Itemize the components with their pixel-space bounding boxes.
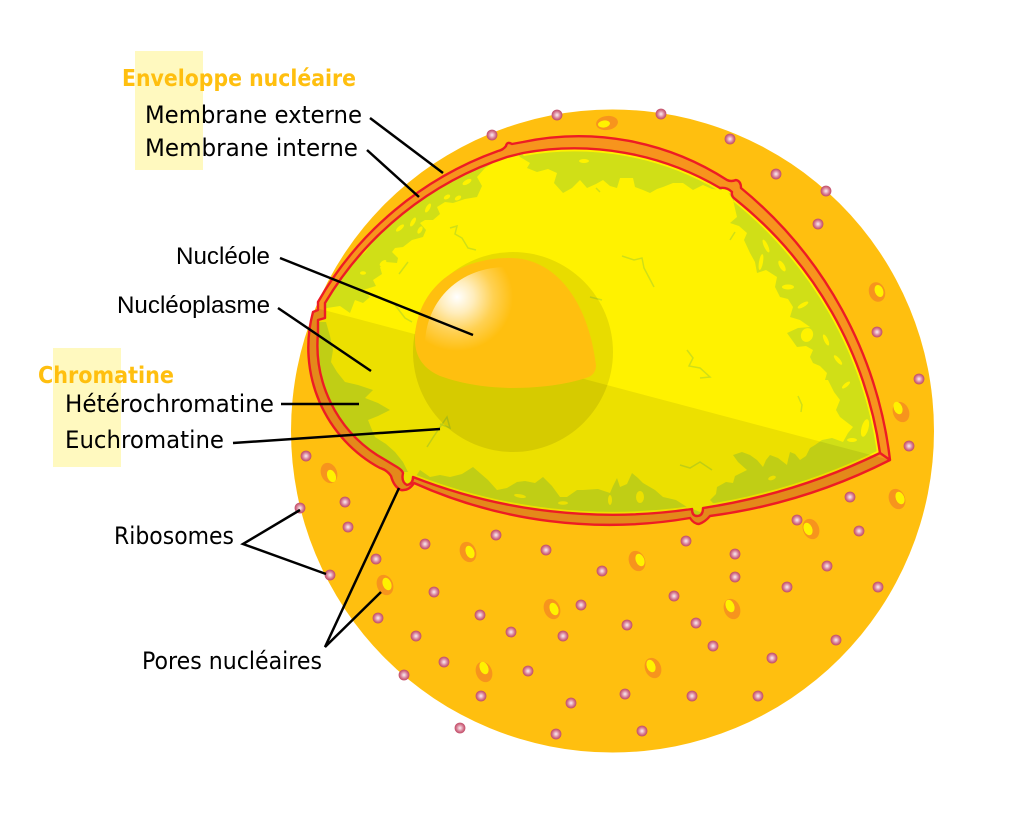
outer and inner membrane lines [308, 136, 890, 525]
arrow: membrane interne [367, 150, 419, 197]
label: ribosomes: Ribosomes [114, 522, 234, 550]
membrane band [308, 136, 890, 525]
heterochromatin [318, 151, 877, 515]
arrow: euchromatine [233, 429, 440, 443]
heading: enveloppe nucléaire: Enveloppe nucléaire [122, 66, 356, 92]
label: hétérochromatine: Hétérochromatine [65, 390, 274, 418]
chromatin holes [360, 159, 871, 505]
heading: chromatine: Chromatine [38, 363, 174, 389]
label: nucléole: Nucléole [176, 243, 270, 270]
ribosomes [295, 109, 924, 739]
arrow: pores nucléaires [325, 488, 399, 647]
highlight: enveloppe labels [135, 51, 203, 170]
nuclear pores on cytoplasm [318, 115, 912, 685]
highlight: chromatine labels [53, 348, 121, 467]
label: membrane interne: Membrane interne [145, 134, 358, 162]
arrow: membrane externe [370, 118, 443, 173]
label: euchromatine: Euchromatine [65, 426, 224, 454]
nucleolus shell [413, 252, 613, 452]
nucleolus [415, 258, 596, 388]
euchromatin threads [395, 188, 802, 470]
arrow: ribosomes [243, 510, 326, 574]
label: nucléoplasme: Nucléoplasme [117, 292, 270, 319]
label: pores nucléaires: Pores nucléaires [142, 647, 322, 675]
nucleus [307, 135, 892, 526]
label: membrane externe: Membrane externe [145, 101, 362, 129]
arrow: nucléoplasme [278, 308, 371, 371]
arrow: nucléole [280, 258, 473, 335]
cut plane shading [310, 309, 888, 524]
arrow: hétérochromatine [281, 403, 359, 405]
yellow rim along inner membrane [413, 148, 880, 515]
cytoplasm sphere [291, 110, 934, 752]
nucleoplasm [317, 148, 880, 516]
